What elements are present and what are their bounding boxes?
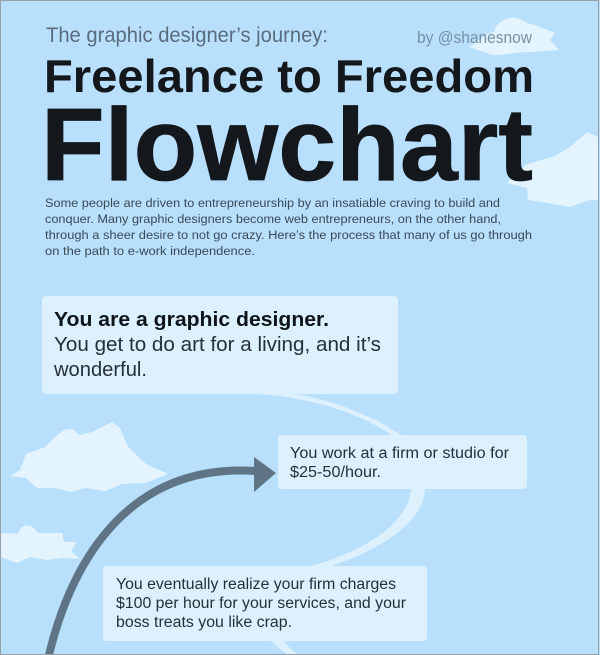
byline: by @shanesnow bbox=[417, 29, 532, 47]
box: you are a graphic designer: You are a graphic designer. bbox=[54, 309, 329, 331]
box: firm charges bbox=[103, 566, 427, 641]
cloud: right bbox=[507, 132, 598, 207]
box: firm or studio: You work at a firm or studio for bbox=[290, 445, 509, 462]
flow line: box two to box three bbox=[308, 488, 425, 567]
subtitle: The graphic designer’s journey: bbox=[46, 24, 328, 47]
intro paragraph bbox=[45, 196, 532, 258]
cloud: left bbox=[10, 422, 168, 492]
box: you are a graphic designer: You get to do art for a living, and it’s bbox=[54, 334, 381, 356]
intro paragraph: conquer. Many graphic designers become web entrepreneurs, on the other hand, bbox=[45, 212, 501, 226]
flow line: box one to box two bbox=[248, 392, 402, 436]
box: firm or studio bbox=[278, 435, 527, 489]
arrow bbox=[49, 457, 276, 655]
box: you are a graphic designer bbox=[42, 296, 398, 394]
title: Freelance to Freedom: Freelance to Freedom bbox=[44, 50, 534, 102]
box: firm charges: boss treats you like crap. bbox=[116, 614, 292, 631]
box: firm charges: $100 per hour for your services, and your bbox=[116, 595, 406, 612]
intro paragraph: through a sheer desire to not go crazy. Here’s the process that many of us go through bbox=[45, 228, 532, 242]
cloud: lower left bbox=[1, 525, 80, 563]
box: you are a graphic designer: wonderful. bbox=[53, 359, 147, 381]
flow line: below box three bbox=[271, 640, 300, 655]
box: firm charges: You eventually realize your firm charges bbox=[116, 576, 396, 593]
title: Flowchart: Flowchart bbox=[41, 87, 533, 202]
box: firm or studio: $25-50/hour. bbox=[290, 464, 381, 481]
intro paragraph: Some people are driven to entrepreneurship by an insatiable craving to build and bbox=[45, 196, 500, 210]
intro paragraph: on the path to e-work independence. bbox=[45, 244, 255, 258]
cloud: top right bbox=[469, 18, 559, 55]
